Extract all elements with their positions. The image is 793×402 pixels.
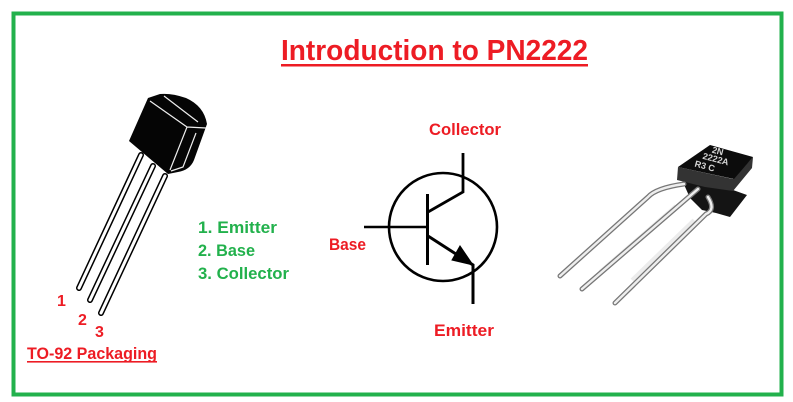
icon: transistor photo bbox=[560, 145, 753, 303]
label: base: Base bbox=[329, 235, 366, 254]
title: Introduction to PN2222 bbox=[281, 35, 588, 67]
photo markings: 2222A bbox=[702, 151, 730, 167]
lead 1 bbox=[79, 155, 141, 288]
photo lead 3 bbox=[615, 197, 712, 303]
lead shadows bbox=[600, 206, 694, 280]
NPN transistor symbol bbox=[364, 153, 497, 304]
photo lead 1 bbox=[560, 184, 684, 276]
pin numbers bbox=[57, 293, 104, 341]
pin numbers: 1 bbox=[57, 293, 66, 310]
body front bbox=[677, 157, 753, 191]
collector lead bbox=[428, 153, 463, 212]
packaging label: TO-92 Packaging bbox=[27, 344, 157, 363]
label: emitter: Emitter bbox=[434, 321, 494, 340]
photo markings: R3 C bbox=[694, 159, 716, 174]
body top bbox=[678, 145, 753, 179]
pin list bbox=[198, 218, 289, 283]
pin numbers: 3 bbox=[95, 324, 104, 341]
label: collector: Collector bbox=[429, 120, 501, 139]
pin list: 1. Emitter bbox=[198, 218, 277, 237]
circle bbox=[389, 173, 497, 281]
emitter lead bbox=[428, 236, 473, 304]
pin list: 2. Base bbox=[198, 241, 255, 260]
body underside and tab bbox=[682, 180, 747, 217]
emitter arrow bbox=[452, 246, 473, 265]
lead 2 bbox=[90, 166, 153, 300]
pin list: 3. Collector bbox=[198, 264, 289, 283]
base lead bbox=[364, 226, 428, 228]
icon: TO-92 transistor drawing bbox=[79, 94, 207, 313]
lead 3 bbox=[101, 176, 165, 313]
body highlights bbox=[150, 96, 206, 171]
base bar bbox=[426, 194, 429, 265]
photo lead 2 bbox=[582, 189, 698, 289]
pin numbers: 2 bbox=[78, 312, 87, 329]
transistor body bbox=[129, 94, 207, 174]
photo markings bbox=[694, 145, 730, 174]
photo markings: 2N bbox=[711, 145, 725, 157]
